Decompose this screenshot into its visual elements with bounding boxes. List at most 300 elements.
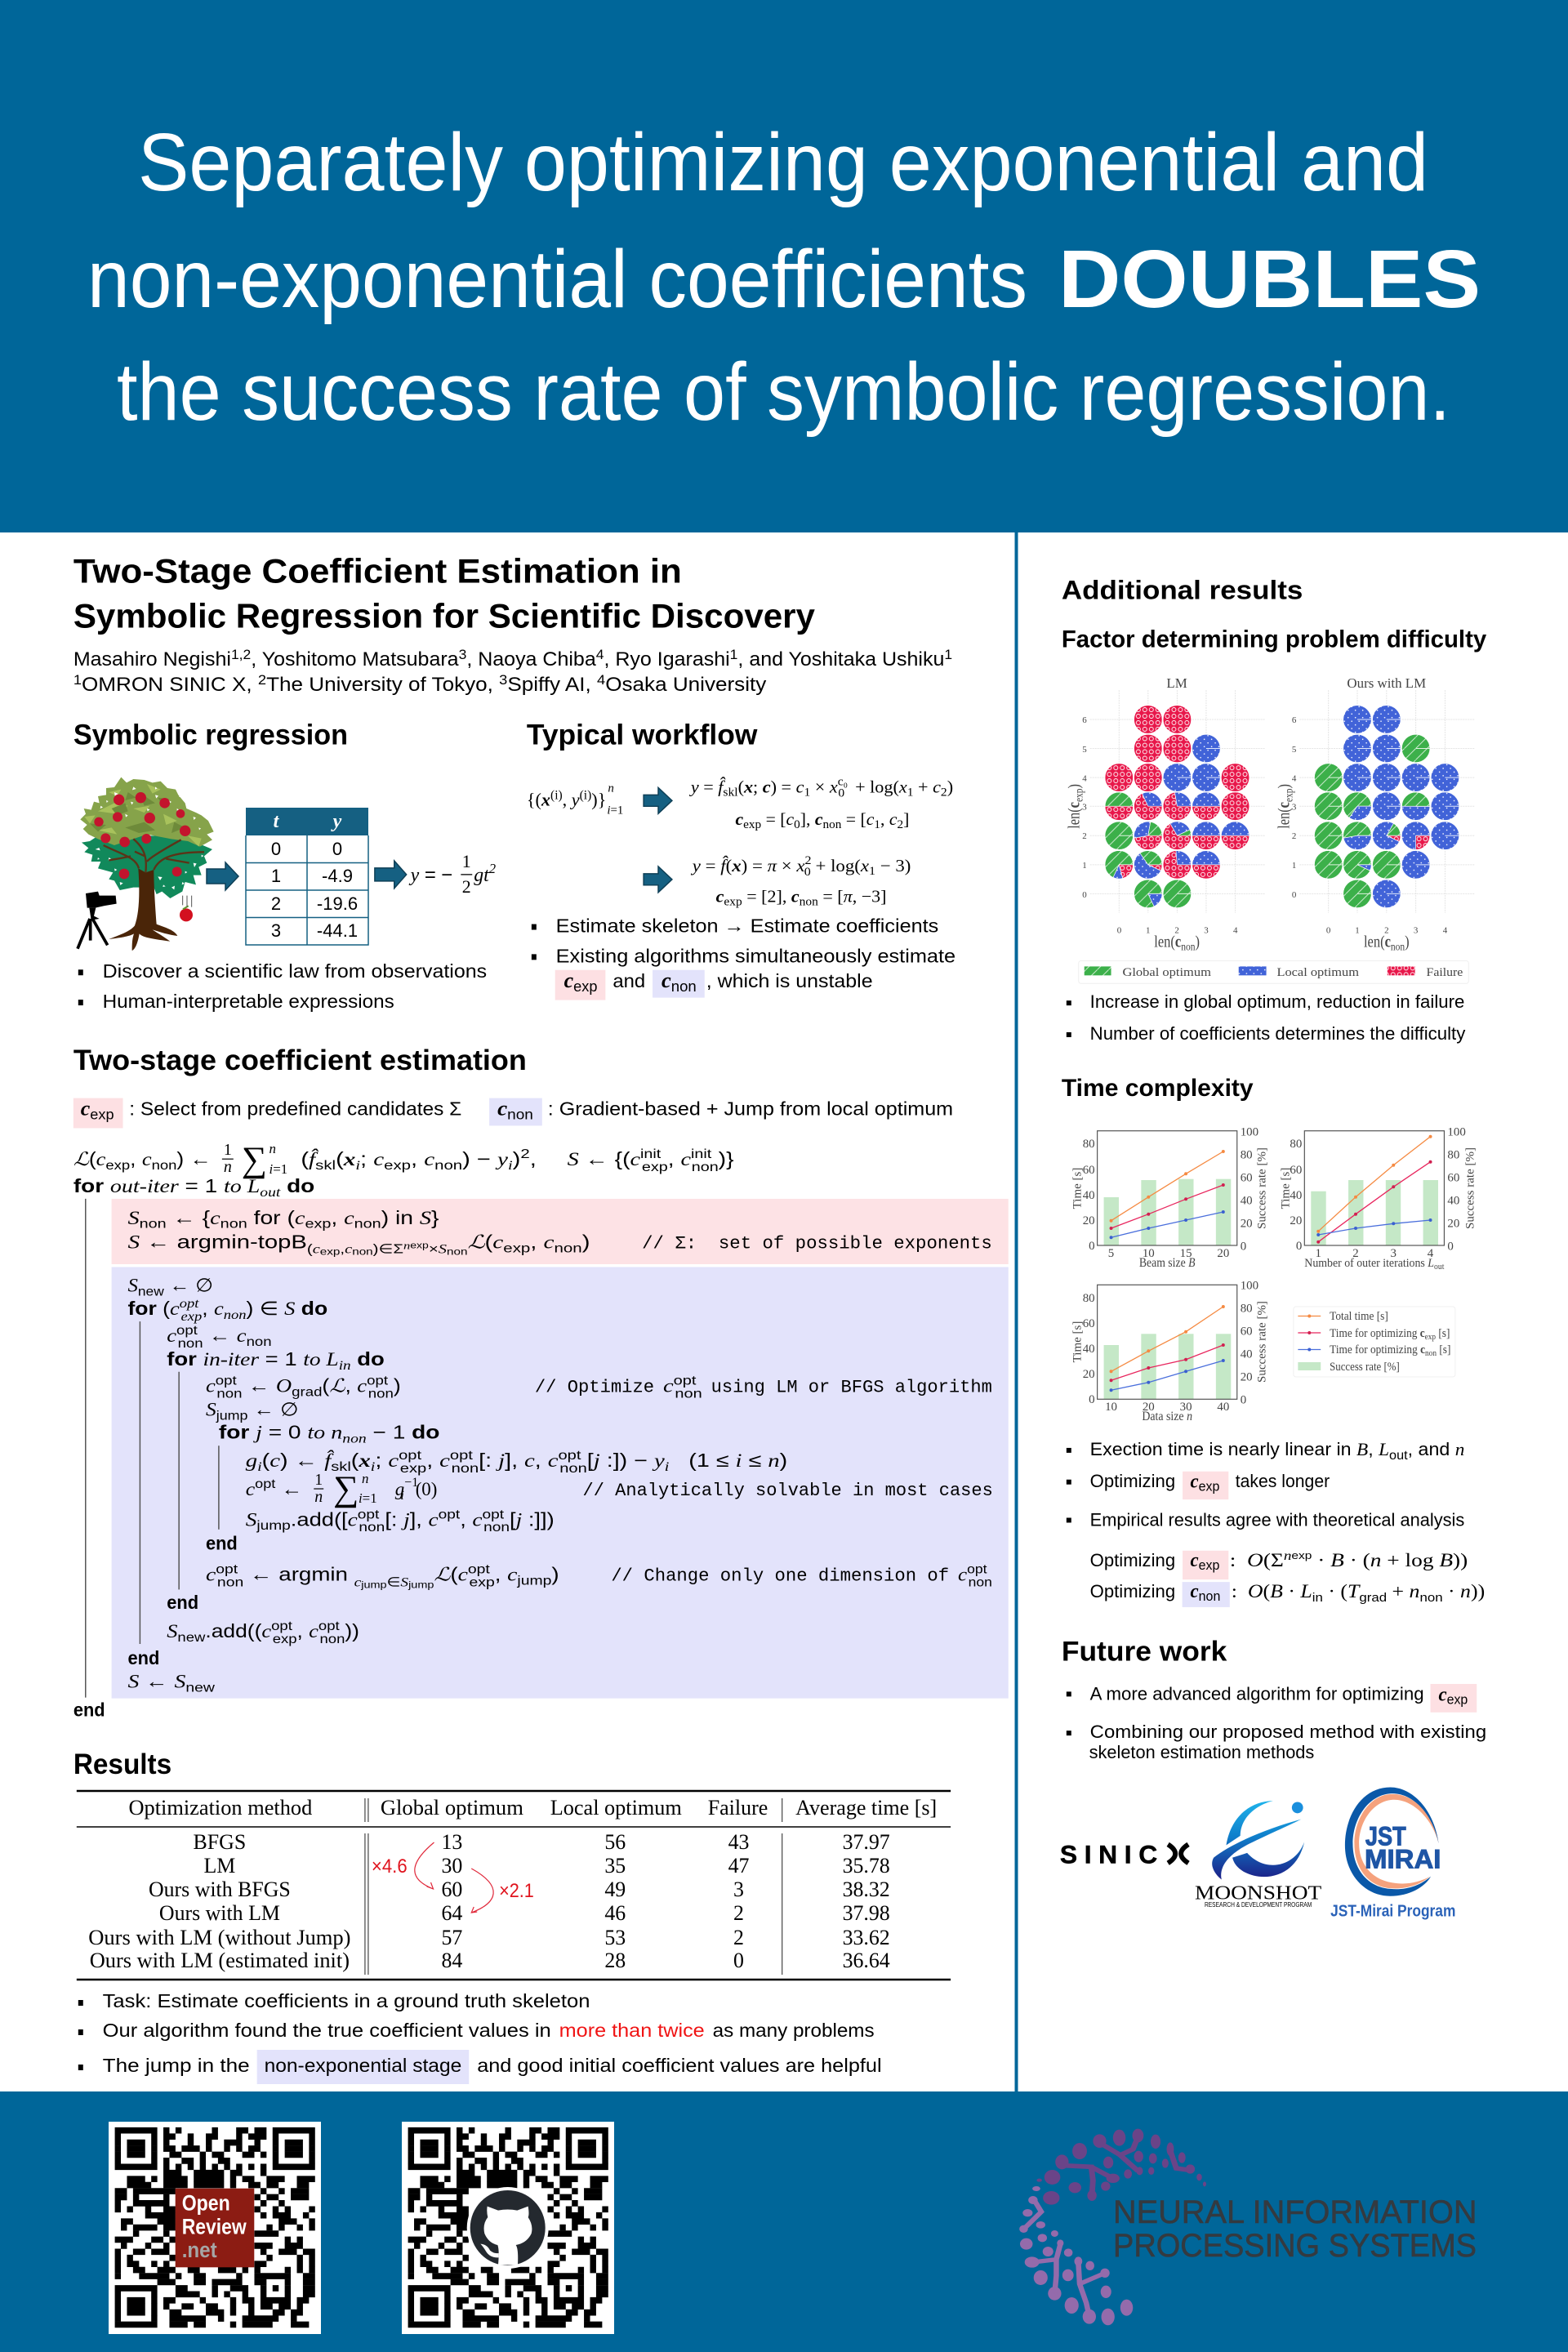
- comment: analytically solvable: // Analytically solvable in most cases: [583, 1481, 993, 1501]
- line-bar chart: outer iterations: 1: [1316, 1247, 1321, 1260]
- panel: results: [74, 1748, 951, 2084]
- table header: Global optimum: [381, 1796, 523, 1820]
- bullet: more than twice: Our algorithm found the true coefficient values in: [103, 2020, 551, 2041]
- pie grid chart: LM: 3: [1204, 926, 1209, 936]
- line-bar chart: data size: 40: [1083, 1343, 1095, 1356]
- complexity formula: cnon: +: [1387, 1581, 1410, 1601]
- loss definition: ℒ(c: [74, 1148, 105, 1169]
- bullet: more than twice: [78, 2020, 875, 2041]
- line-bar chart: beam size: 20: [1241, 1218, 1253, 1231]
- bullet: cexp longer: Optimizing: [1090, 1471, 1175, 1491]
- bullet: advanced algorithm: exp: [1447, 1691, 1468, 1707]
- line copt mean of inverses: i: [400, 1489, 404, 1503]
- algorithm listing: [74, 1140, 993, 1721]
- bullet: linear time: [1067, 1439, 1464, 1463]
- table body: 2: [733, 1901, 744, 1925]
- authors: , and Yoshitaka Ushiku: [737, 648, 944, 670]
- line Snew add: exp: [273, 1633, 297, 1646]
- headline line 3: the success rate of symbolic regression.: [117, 346, 1450, 438]
- logo: moonshot: RESEARCH & DEVELOPMENT PROGRAM: [1205, 1901, 1312, 1909]
- line-bar chart: data size: 0: [1089, 1393, 1095, 1406]
- line copt mean of inverses: (0): [416, 1479, 437, 1499]
- equation: skeleton: x: [898, 777, 907, 796]
- results table: [77, 1791, 951, 1980]
- line Snew add: opt: [271, 1619, 292, 1633]
- loss definition: ,: [668, 1148, 680, 1169]
- bullet: more than twice: as many problems: [713, 2020, 875, 2041]
- bullet: existing algorithms: c: [662, 969, 671, 992]
- line argmin jump: ∈: [387, 1575, 400, 1589]
- table header: Average time [s]: [795, 1796, 937, 1820]
- affiliations: 1: [74, 672, 82, 688]
- loss definition: ,: [530, 1148, 537, 1169]
- arrow: to final expression: [644, 866, 672, 893]
- line argmin-topB: (: [307, 1243, 314, 1257]
- line Snew init: S: [127, 1275, 139, 1295]
- panel: two-stage coefficient estimation: [74, 1045, 1009, 1721]
- line gi definition: (: [351, 1450, 359, 1471]
- loss definition: x: [343, 1149, 355, 1169]
- for inner loop: for in-iter = 1 to L: [167, 1348, 332, 1370]
- line argmin-topB: ×: [429, 1243, 439, 1257]
- arrow: to skeleton: [644, 787, 672, 813]
- table body: Ours with LM (estimated init): [90, 1949, 350, 1972]
- line copt mean of inverses: 1: [314, 1471, 323, 1489]
- line-bar chart: data size: 60: [1241, 1325, 1253, 1339]
- line-bar chart: beam size: 60: [1083, 1164, 1095, 1177]
- arrow: times 2.1: ×2.1: [499, 1880, 534, 1902]
- line-bar chart: outer iterations: 100: [1447, 1126, 1466, 1139]
- bullet: linear time: , and: [1408, 1439, 1455, 1459]
- line argmin jump: c: [354, 1575, 361, 1589]
- loss definition: [74, 1140, 734, 1179]
- line Snew add: opt: [318, 1619, 340, 1633]
- time chart legend: Total time [s]: [1330, 1310, 1388, 1323]
- equation: skeleton: y = f̂: [691, 777, 723, 796]
- line copt mean of inverses: −1: [404, 1476, 418, 1490]
- pie grid chart: Ours with LM: 3: [1292, 802, 1297, 812]
- time chart legend: [s]: [1437, 1343, 1450, 1356]
- equation: estimated values: c: [716, 887, 724, 906]
- pie grid chart: LM: non: [1181, 942, 1196, 954]
- icon: apple tree with camera: [78, 777, 214, 951]
- comment: change one dimension: // Change only one dimension of: [611, 1566, 949, 1586]
- line gi definition: i: [665, 1460, 669, 1474]
- table body: Ours with BFGS: [149, 1878, 291, 1901]
- for candidates: ) ∈: [247, 1298, 284, 1319]
- line Sjump add: c: [472, 1509, 483, 1530]
- bullet: combining methods: [1067, 1722, 1486, 1762]
- line Snon: S: [127, 1208, 140, 1228]
- line Snon: ← {: [167, 1207, 211, 1228]
- line-bar chart: beam size: [1071, 1126, 1269, 1270]
- line-bar chart: beam size: 40: [1241, 1195, 1253, 1208]
- comment: optimize: // Optimize: [535, 1378, 654, 1398]
- complexity formula: cnon: [1090, 1581, 1485, 1607]
- subheading: factor determining: Factor determining problem difficulty: [1062, 626, 1487, 653]
- line gi definition: skl: [331, 1460, 351, 1474]
- loss definition: ): [513, 1148, 520, 1169]
- line Sjump add: opt: [358, 1508, 380, 1521]
- footer band: [0, 2091, 1568, 2352]
- equation: free fall law: 2: [489, 861, 496, 876]
- pie grid chart: Ours with LM: 4: [1443, 926, 1448, 936]
- time chart legend: Time for optimizing c: [1330, 1327, 1425, 1340]
- bullet: combining methods: Combining our proposed method with existing: [1090, 1722, 1486, 1742]
- pie grid chart: Ours with LM: 4: [1292, 774, 1297, 784]
- line argmin jump: S: [400, 1575, 408, 1589]
- line gi definition: ;: [375, 1450, 388, 1471]
- end candidates: end: [127, 1647, 159, 1668]
- table body: LM: [203, 1854, 235, 1878]
- for j loop: for j = 0 to n: [219, 1421, 336, 1442]
- pie grid chart: Ours with LM: 5: [1292, 745, 1297, 755]
- line argmin-topB: exp: [410, 1241, 429, 1251]
- bullet: existing algorithms: non: [671, 978, 697, 995]
- bullet: more than twice: more than twice: [559, 2020, 705, 2041]
- line-bar chart: beam size: 80: [1241, 1149, 1253, 1162]
- bullet: combining methods: skeleton estimation methods: [1089, 1742, 1314, 1762]
- algorithm blue stage background: [112, 1267, 1009, 1699]
- pie grid chart: Ours with LM: exp: [1283, 788, 1295, 802]
- complexity formula: cnon: non: [1199, 1588, 1220, 1604]
- logo: NeurIPS: PROCESSING SYSTEMS: [1113, 2228, 1477, 2264]
- loss definition: ∑: [242, 1140, 267, 1179]
- line argmin-topB: c: [544, 1232, 555, 1253]
- section: time complexity charts: [1062, 1075, 1477, 1423]
- bullet: advanced algorithm: c: [1438, 1684, 1447, 1705]
- for candidates: opt: [180, 1297, 199, 1311]
- line-bar chart: data size: Data size n: [1142, 1410, 1192, 1423]
- line Snon: c: [344, 1208, 354, 1228]
- bullet: existing algorithms: , which is unstable: [706, 970, 873, 991]
- loss definition: y: [496, 1149, 509, 1169]
- table body: 0: [733, 1949, 744, 1972]
- equation: skeleton: +: [913, 777, 933, 796]
- line argmin jump: ℒ: [434, 1564, 451, 1584]
- line-bar chart: beam size: Beam size B: [1139, 1256, 1196, 1270]
- legend: non-exponent coefficients: c: [497, 1098, 507, 1120]
- line-bar chart: outer iterations: 80: [1447, 1149, 1459, 1162]
- for candidates: for (c: [127, 1298, 178, 1319]
- arrow: times 2.1: [471, 1869, 534, 1913]
- loss definition: non: [692, 1160, 719, 1174]
- line-bar chart: beam size: 5: [1108, 1247, 1114, 1260]
- bullet: existing algorithms: and: [612, 970, 645, 991]
- line argmin-topB: ): [582, 1232, 590, 1253]
- for outer loop: out: [260, 1186, 281, 1200]
- table head y: y: [331, 811, 342, 832]
- table body: 49: [604, 1878, 626, 1901]
- line argmin jump: ,: [495, 1563, 507, 1584]
- line argmin jump: jump: [516, 1574, 552, 1588]
- QR code: GitHub: [402, 2122, 614, 2334]
- line copt init: non: [178, 1337, 203, 1351]
- panel: additional results: [1062, 575, 1487, 1607]
- table body: 47: [728, 1854, 749, 1878]
- complexity formula: cnon: : O(B · L: [1232, 1581, 1311, 1601]
- line gradient optimize: ): [394, 1375, 401, 1396]
- table cells: 2: [271, 893, 281, 914]
- pie grid chart: LM: 4: [1233, 926, 1238, 936]
- paper title line 1: Two-Stage Coefficient Estimation in: [74, 552, 682, 590]
- equation: coefficient split: c: [736, 809, 743, 829]
- table header: Optimization method: [128, 1796, 312, 1820]
- line Snew add: .add((: [205, 1620, 262, 1642]
- equation: dataset: )}: [591, 790, 606, 809]
- line-bar chart: data size: 10: [1105, 1401, 1117, 1414]
- end outer loop: end: [74, 1699, 105, 1721]
- line copt mean of inverses: opt: [255, 1477, 276, 1491]
- pie grid chart: LM: 4: [1082, 774, 1087, 784]
- equation: coefficient split: c: [786, 809, 795, 829]
- pie grid chart: LM: len(c: [1066, 800, 1084, 829]
- bullet: cexp longer: c: [1191, 1472, 1199, 1493]
- equation: skeleton: c: [933, 777, 942, 796]
- bullet: linear time: Exection time is nearly linear in B, L: [1090, 1439, 1388, 1459]
- table body: Ours with LM: [159, 1901, 280, 1925]
- line Sjump init: jump: [216, 1409, 248, 1423]
- panel: symbolic regression: [74, 719, 496, 1012]
- table body: 30: [441, 1854, 462, 1878]
- equation: estimated values: c: [791, 887, 800, 906]
- equation: estimated values: non: [800, 896, 819, 909]
- line gi definition: [:: [479, 1450, 498, 1471]
- equation: dataset: i=1: [607, 804, 623, 817]
- pie grid chart: LM: 2: [1174, 926, 1179, 936]
- complexity formula: cexp: c: [1191, 1550, 1199, 1571]
- time chart legend: Time for optimizing c: [1330, 1343, 1426, 1356]
- pie grid chart: LM: ): [1066, 784, 1084, 789]
- line Snon: for (: [247, 1207, 295, 1228]
- pie grid chart: Ours with LM: ): [1405, 933, 1410, 951]
- equation: free fall law: 1: [462, 852, 471, 871]
- loss definition: 2: [520, 1147, 530, 1161]
- equation: coefficient split: ,: [880, 809, 889, 829]
- line-bar chart: data size: 80: [1241, 1302, 1253, 1316]
- line-bar chart: data size: 30: [1180, 1401, 1192, 1414]
- complexity formula: cnon: T: [1348, 1581, 1361, 1601]
- table cells: [271, 839, 358, 941]
- line Snew add: c: [261, 1621, 271, 1642]
- equation: coefficient split: = [: [761, 809, 786, 829]
- for inner loop: in: [339, 1359, 351, 1373]
- QR code: OpenReview: .net: [182, 2238, 217, 2262]
- complexity formula: cnon: Optimizing: [1090, 1581, 1175, 1601]
- legend: non-exponent coefficients: : Gradient-based + Jump from local optimum: [542, 1098, 953, 1119]
- line-bar chart: beam size: 40: [1083, 1189, 1095, 1202]
- line Sjump add: non: [359, 1521, 385, 1535]
- table cells: 1: [271, 866, 281, 886]
- pie grid chart: Ours with LM: 3: [1414, 926, 1419, 936]
- complexity formula: cnon: · (: [1323, 1581, 1348, 1601]
- line Snon: ,: [331, 1207, 344, 1228]
- for candidates: S do: [284, 1298, 324, 1319]
- for candidates: c: [214, 1298, 224, 1319]
- equation: dataset: y: [570, 790, 580, 809]
- pie grid chart: Ours with LM: [1275, 675, 1474, 954]
- equation: estimated expression: + log(: [811, 856, 861, 875]
- equation: coefficient split: 0: [794, 818, 800, 831]
- complexity formula: cnon: in: [1312, 1591, 1323, 1605]
- table body: 2: [733, 1926, 744, 1949]
- line-bar chart: outer iterations: 40: [1290, 1189, 1302, 1202]
- line Snon: non: [354, 1218, 381, 1232]
- headline line 2: non-exponential coefficients: [87, 234, 1027, 325]
- equation: free fall law: y = −: [409, 864, 452, 886]
- line Snew add: )): [345, 1620, 359, 1642]
- affiliations: The University of Tokyo,: [266, 674, 499, 696]
- line-bar chart: data size: 20: [1143, 1401, 1155, 1414]
- line copt init: c: [237, 1325, 247, 1346]
- pie grid chart: LM: exp: [1074, 788, 1086, 802]
- line Sjump add: S: [246, 1509, 257, 1530]
- line argmin-topB: non: [352, 1246, 373, 1258]
- line gradient optimize: O: [276, 1376, 292, 1396]
- bullet: number of coefficients: Number of coefficients determines the difficulty: [1090, 1023, 1465, 1044]
- bullet: task: Task: Estimate coefficients in a ground truth skeleton: [103, 1990, 590, 2011]
- logo: NeurIPS: NEURAL INFORMATION: [1113, 2194, 1477, 2230]
- bullet: empirical agree: Empirical results agree with theoretical analysis: [1090, 1509, 1464, 1530]
- bullet: linear time: n: [1455, 1440, 1464, 1459]
- table body: 64: [441, 1901, 462, 1925]
- equation: coefficient split: c: [866, 809, 875, 829]
- pie chart legend: Failure: [1427, 966, 1463, 979]
- legend: exponent coefficients: exp: [90, 1106, 114, 1122]
- line Snew init: new: [138, 1285, 164, 1298]
- line Sjump add: j :]]): [516, 1508, 549, 1530]
- equation: estimated expression: 1: [869, 865, 875, 878]
- line argmin-topB: non: [555, 1242, 582, 1256]
- subheading: time complexity: Time complexity: [1062, 1075, 1254, 1102]
- equation: skeleton: 2: [941, 786, 947, 799]
- equation: skeleton: ): [947, 777, 953, 796]
- comment: change one dimension: [611, 1562, 992, 1589]
- line argmin-topB: exp: [320, 1246, 341, 1258]
- loss definition: ) −: [462, 1148, 497, 1169]
- time chart legend: exp: [1425, 1333, 1436, 1342]
- pie grid chart: Ours with LM: 2: [1292, 831, 1296, 841]
- line gradient optimize: ℒ, c: [329, 1375, 365, 1396]
- authors: 1,2: [231, 647, 251, 662]
- equation: skeleton: 0: [838, 786, 844, 800]
- table body: 53: [604, 1926, 626, 1949]
- line argmin-topB: exp: [503, 1242, 530, 1256]
- line gi definition: (1 ≤: [669, 1450, 736, 1471]
- equation: skeleton: x: [829, 777, 838, 796]
- equation: coefficient split: ],: [800, 809, 815, 829]
- line Snew add: non: [320, 1633, 345, 1646]
- pie grid chart: LM: 1: [1082, 861, 1087, 871]
- line argmin-topB: c: [345, 1243, 352, 1257]
- table body: 56: [604, 1830, 626, 1854]
- line Snon: non: [140, 1218, 167, 1232]
- equation: skeleton: 1: [804, 786, 810, 799]
- table head t: t: [274, 811, 280, 832]
- arrow: tree to table: [207, 862, 238, 890]
- table cells: -4.9: [322, 866, 353, 886]
- logo: NeurIPS: [1019, 2129, 1477, 2325]
- line gradient optimize: grad: [292, 1386, 322, 1400]
- loss definition: (: [336, 1148, 344, 1169]
- line argmin jump: non: [217, 1575, 243, 1589]
- line-bar chart: data size: [1071, 1279, 1269, 1423]
- equation: coefficient split: non: [823, 818, 842, 831]
- line argmin jump: jump: [408, 1579, 434, 1590]
- panel: future work: [1062, 1637, 1486, 1762]
- equation: coefficient split: ]: [903, 809, 909, 829]
- line gradient optimize: (: [322, 1375, 330, 1396]
- line-bar chart: data size: 0: [1241, 1393, 1246, 1407]
- table body: 60: [441, 1878, 462, 1901]
- line argmin-topB: (c: [485, 1232, 501, 1253]
- line argmin jump: opt: [468, 1562, 490, 1576]
- for candidates: non: [224, 1308, 247, 1322]
- line-bar chart: outer iterations: Number of outer iterations L: [1304, 1257, 1435, 1270]
- for outer loop: do: [287, 1175, 314, 1196]
- equation: estimated expression: 0: [804, 866, 811, 879]
- line Snon: ) in: [381, 1207, 420, 1228]
- table cells: -44.1: [317, 920, 358, 941]
- line-bar chart: outer iterations: 3: [1391, 1247, 1396, 1260]
- pie grid chart: LM: 1: [1146, 926, 1151, 936]
- table body: 13: [441, 1830, 462, 1854]
- line argmin-topB: )∈Σ: [373, 1243, 403, 1257]
- line-bar chart: data size: Success rate [%]: [1256, 1301, 1269, 1383]
- loss definition: non: [434, 1159, 462, 1173]
- bullet: jump helpful: [78, 2050, 882, 2084]
- heading: future work: Future work: [1062, 1637, 1227, 1668]
- time chart legend: non: [1425, 1349, 1437, 1358]
- line copt mean of inverses: [246, 1469, 437, 1508]
- equation: coefficient split: 1: [874, 818, 880, 831]
- bullet: existing algorithms: exp: [573, 978, 597, 995]
- loss definition: init: [640, 1147, 662, 1161]
- end inner loop: end: [167, 1592, 198, 1613]
- line gi definition: [: [587, 1450, 595, 1471]
- line-bar chart: outer iterations: 20: [1290, 1214, 1302, 1227]
- line copt mean of inverses: ∑: [333, 1469, 359, 1508]
- equation: dataset: (i): [550, 788, 563, 802]
- line argmin-topB: n: [403, 1240, 410, 1252]
- complexity formula: cexp: [1090, 1549, 1468, 1579]
- table body: [88, 1830, 890, 1972]
- line gi definition: x: [358, 1450, 371, 1471]
- line S update: S ← S: [127, 1671, 184, 1692]
- bullet: jump helpful: and good initial coefficient values are helpful: [477, 2055, 882, 2076]
- pie chart legend: [1079, 960, 1468, 983]
- line gi definition: (: [262, 1450, 270, 1471]
- pie grid chart: Ours with LM: 0: [1326, 926, 1331, 936]
- loss definition: ,: [130, 1148, 142, 1169]
- line Snon: c: [210, 1208, 220, 1228]
- pie grid chart: LM: ): [1195, 933, 1200, 951]
- line copt init: non: [247, 1335, 272, 1349]
- loss definition: init: [691, 1147, 712, 1161]
- loss definition: non: [152, 1159, 176, 1173]
- line copt init: c: [167, 1325, 176, 1346]
- headline line 1: Separately optimizing exponential and: [138, 117, 1428, 208]
- equation: dataset: {(x: [527, 790, 550, 809]
- line argmin-topB: S: [439, 1243, 447, 1257]
- line gi definition: i: [371, 1460, 375, 1474]
- table header: Local optimum: [550, 1796, 682, 1820]
- pie grid chart: Ours with LM: len(c: [1364, 933, 1392, 951]
- line-bar chart: beam size: 0: [1089, 1240, 1095, 1253]
- comment: change one dimension: non: [969, 1575, 992, 1589]
- loss definition: )}: [719, 1148, 734, 1169]
- logo: JST Mirai: [1330, 1788, 1455, 1920]
